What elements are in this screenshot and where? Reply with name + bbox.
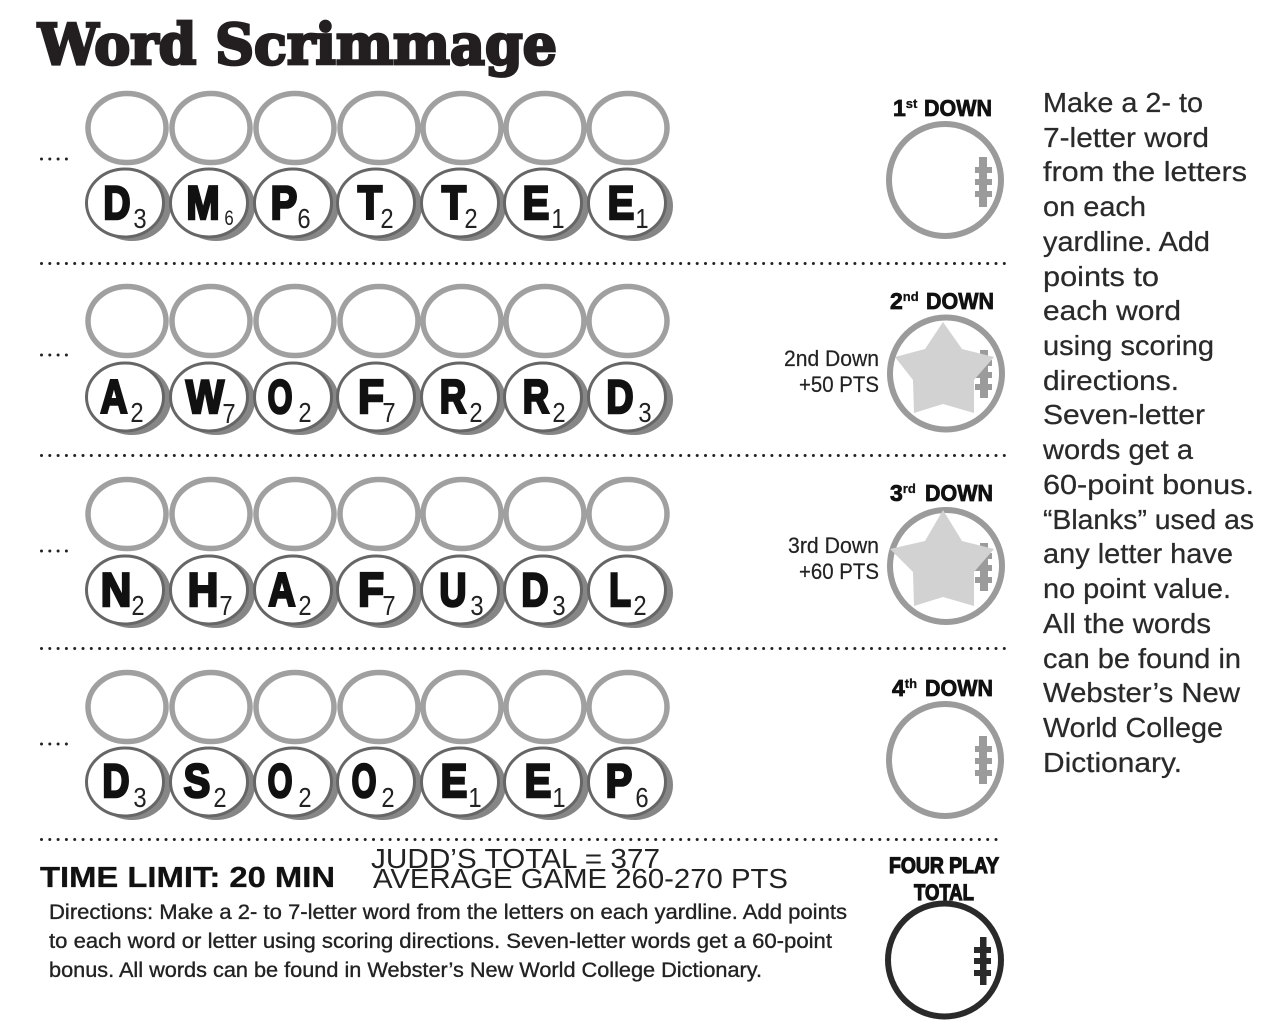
tile O2 <box>254 363 339 435</box>
tile T2: T <box>442 178 467 230</box>
side instructions text block: All the words <box>1043 608 1211 639</box>
row marker dots <box>42 742 68 746</box>
label: 2nd down: 2 <box>890 288 903 314</box>
bonus note: +60 PTS <box>799 559 879 584</box>
tile U3: U <box>439 564 467 617</box>
tile E1: 1 <box>635 202 649 234</box>
tile A2: A <box>268 564 296 617</box>
tile T2: 2 <box>464 202 478 234</box>
tile R2 <box>422 363 506 435</box>
tile P6: 6 <box>635 781 649 813</box>
tile F7 <box>338 363 422 435</box>
tile P6: P <box>271 178 297 230</box>
tile D3: D <box>103 177 131 230</box>
tile L2: L <box>609 563 631 616</box>
tile P6: 6 <box>297 202 311 234</box>
4th down score football <box>889 675 1001 816</box>
tile S2: S <box>184 756 210 808</box>
tile P6 <box>254 169 339 241</box>
bonus note <box>784 346 879 397</box>
tile F7: F <box>358 565 384 617</box>
icon: laces <box>975 736 992 784</box>
side instructions text block: each word <box>1043 295 1181 326</box>
tile E1: 1 <box>552 781 566 813</box>
tile D3: D <box>102 755 130 808</box>
tile D3 <box>588 363 673 435</box>
label: 1st down: 1 <box>893 95 906 121</box>
tile F7 <box>338 556 422 628</box>
tile E1: 1 <box>468 781 482 813</box>
row 1: first down yardline <box>42 94 673 241</box>
label: 3rd down: DOWN <box>925 480 993 506</box>
average game: AVERAGE GAME 260-270 PTS <box>373 863 788 894</box>
tile A2 <box>254 556 339 628</box>
label: 1st down: st <box>906 96 918 111</box>
icon: laces <box>975 350 992 398</box>
side instructions text block: “Blanks” used as <box>1043 504 1254 535</box>
bonus note: 3rd Down <box>788 533 879 558</box>
tile W7: 7 <box>222 397 236 429</box>
time limit: TIME LIMIT: 20 MIN <box>40 862 335 894</box>
row marker dots <box>42 550 68 552</box>
bonus note: 2nd Down <box>784 346 879 371</box>
label: 4th down: 4 <box>892 675 905 701</box>
tile L2 <box>588 556 673 628</box>
tile H7: H <box>188 565 218 617</box>
side instructions text block: no point value. <box>1043 573 1231 604</box>
tile W7 <box>170 363 255 435</box>
tile T2: 2 <box>380 202 394 234</box>
tile O2: 2 <box>298 781 312 813</box>
tile A2: A <box>100 371 128 424</box>
side instructions text block: Dictionary. <box>1043 747 1182 778</box>
side instructions text block: World College <box>1043 712 1223 743</box>
tile M6 <box>170 169 255 241</box>
3rd down score football with star bonus <box>788 480 1002 622</box>
tile R2 <box>504 363 589 435</box>
side instructions text block: using scoring <box>1043 330 1214 361</box>
tile W7: W <box>186 371 225 424</box>
tile O2: O <box>268 755 292 808</box>
row marker dots <box>42 158 68 160</box>
tile R2: R <box>523 371 549 423</box>
row marker dots <box>42 354 68 356</box>
label: 2nd down: nd <box>903 289 919 304</box>
tile D3: D <box>606 371 634 424</box>
2nd down score football with star bonus <box>784 288 1002 430</box>
answer circles <box>88 94 667 162</box>
tile D3: 3 <box>552 589 566 621</box>
answer circles <box>88 672 667 742</box>
tile H7 <box>170 556 255 628</box>
tile H7: 7 <box>219 589 233 621</box>
icon: star <box>890 510 994 606</box>
judd's total: JUDD’S TOTAL = 377 <box>371 843 660 874</box>
tile A2 <box>86 363 171 435</box>
row 2: second down yardline <box>42 286 673 435</box>
label: 1st down: DOWN <box>924 95 992 121</box>
side instructions text block: Webster’s New <box>1043 677 1241 708</box>
tile O2: 2 <box>381 781 395 813</box>
tile F7: 7 <box>382 396 396 428</box>
answer circles <box>88 286 667 356</box>
directions: bonus. All words can be found in Webster’s New World College Dictionary. <box>49 959 762 982</box>
tile D3: D <box>521 564 549 617</box>
side instructions text block: 7-letter word <box>1043 122 1209 153</box>
icon: laces <box>974 937 991 985</box>
side instructions text block: points to <box>1043 261 1159 292</box>
tile D3 <box>86 169 171 241</box>
icon: laces <box>975 543 992 591</box>
tile E1: E <box>441 756 467 808</box>
tile T2 <box>422 169 506 241</box>
bonus note <box>788 533 879 584</box>
tile L2: 2 <box>633 589 647 621</box>
tile D3 <box>504 556 589 628</box>
side instructions text block: Make a 2- to <box>1043 87 1203 118</box>
row 3: third down yardline <box>42 480 673 628</box>
tile E1: 1 <box>551 202 565 234</box>
side instructions text block: can be found in <box>1043 643 1241 674</box>
tile T2: T <box>358 178 383 230</box>
side instructions text block: from the letters <box>1043 156 1247 187</box>
side instructions text block: any letter have <box>1043 538 1233 569</box>
side instructions text block: on each <box>1043 191 1146 222</box>
tile M6: M <box>186 178 220 230</box>
side instructions text block: 60-point bonus. <box>1043 469 1254 500</box>
side instructions text block: directions. <box>1043 365 1179 396</box>
tile N2: 2 <box>131 589 145 621</box>
tile O2: 2 <box>298 396 312 428</box>
tile R2: R <box>440 371 466 423</box>
tile U3 <box>422 556 506 628</box>
tile N2: N <box>101 565 131 617</box>
tile D3: 3 <box>638 396 652 428</box>
answer circles <box>88 480 667 548</box>
tile D3: 3 <box>133 202 147 234</box>
tile E1 <box>504 169 589 241</box>
tile A2: 2 <box>298 589 312 621</box>
tile O2: O <box>268 371 292 424</box>
tile F7: 7 <box>382 589 396 621</box>
side instructions text block: yardline. Add <box>1043 226 1210 257</box>
row 4: fourth down yardline <box>42 672 673 820</box>
title: Word Scrimmage <box>37 12 557 78</box>
tile A2: 2 <box>130 396 144 428</box>
side instructions text block: words get a <box>1042 434 1193 465</box>
label: four play total: FOUR PLAY <box>889 853 999 878</box>
side instructions text block: Seven-letter <box>1043 399 1205 430</box>
tile E1 <box>422 748 506 820</box>
icon: star <box>895 322 994 413</box>
icon: laces <box>975 157 992 207</box>
label: 2nd down: DOWN <box>926 288 994 314</box>
tile P6 <box>588 748 673 820</box>
tile O2: O <box>352 755 376 808</box>
tile N2 <box>86 556 171 628</box>
tile O2 <box>254 748 339 820</box>
tile E1 <box>588 169 673 241</box>
side instructions text block <box>1042 87 1254 778</box>
1st down score football <box>889 95 1001 236</box>
bonus note: +50 PTS <box>799 372 879 397</box>
label: four play total: TOTAL <box>914 880 974 905</box>
tile E1: E <box>525 756 551 808</box>
tile R2: 2 <box>552 396 566 428</box>
tile S2 <box>170 748 255 820</box>
tile F7: F <box>358 372 384 424</box>
tile S2: 2 <box>213 781 227 813</box>
tile D3 <box>86 748 171 820</box>
tile M6: 6 <box>224 207 234 231</box>
label: 4th down: th <box>905 676 917 691</box>
tile T2 <box>338 169 422 241</box>
label: 4th down: DOWN <box>925 675 993 701</box>
tile U3: 3 <box>470 589 484 621</box>
tile E1 <box>504 748 589 820</box>
tile P6: P <box>606 756 632 808</box>
four play total football <box>888 853 1001 1016</box>
directions <box>49 901 847 982</box>
tile E1: E <box>608 178 634 230</box>
tile E1: E <box>523 178 549 230</box>
tile R2: 2 <box>469 396 483 428</box>
directions: Directions: Make a 2- to 7-letter word from the letters on each yardline. Add points <box>49 901 847 924</box>
tile O2 <box>338 748 422 820</box>
tile D3: 3 <box>133 781 147 813</box>
directions: to each word or letter using scoring directions. Seven-letter words get a 60-point <box>49 930 832 953</box>
label: 3rd down: rd <box>903 481 916 496</box>
label: 3rd down: 3 <box>890 480 903 506</box>
